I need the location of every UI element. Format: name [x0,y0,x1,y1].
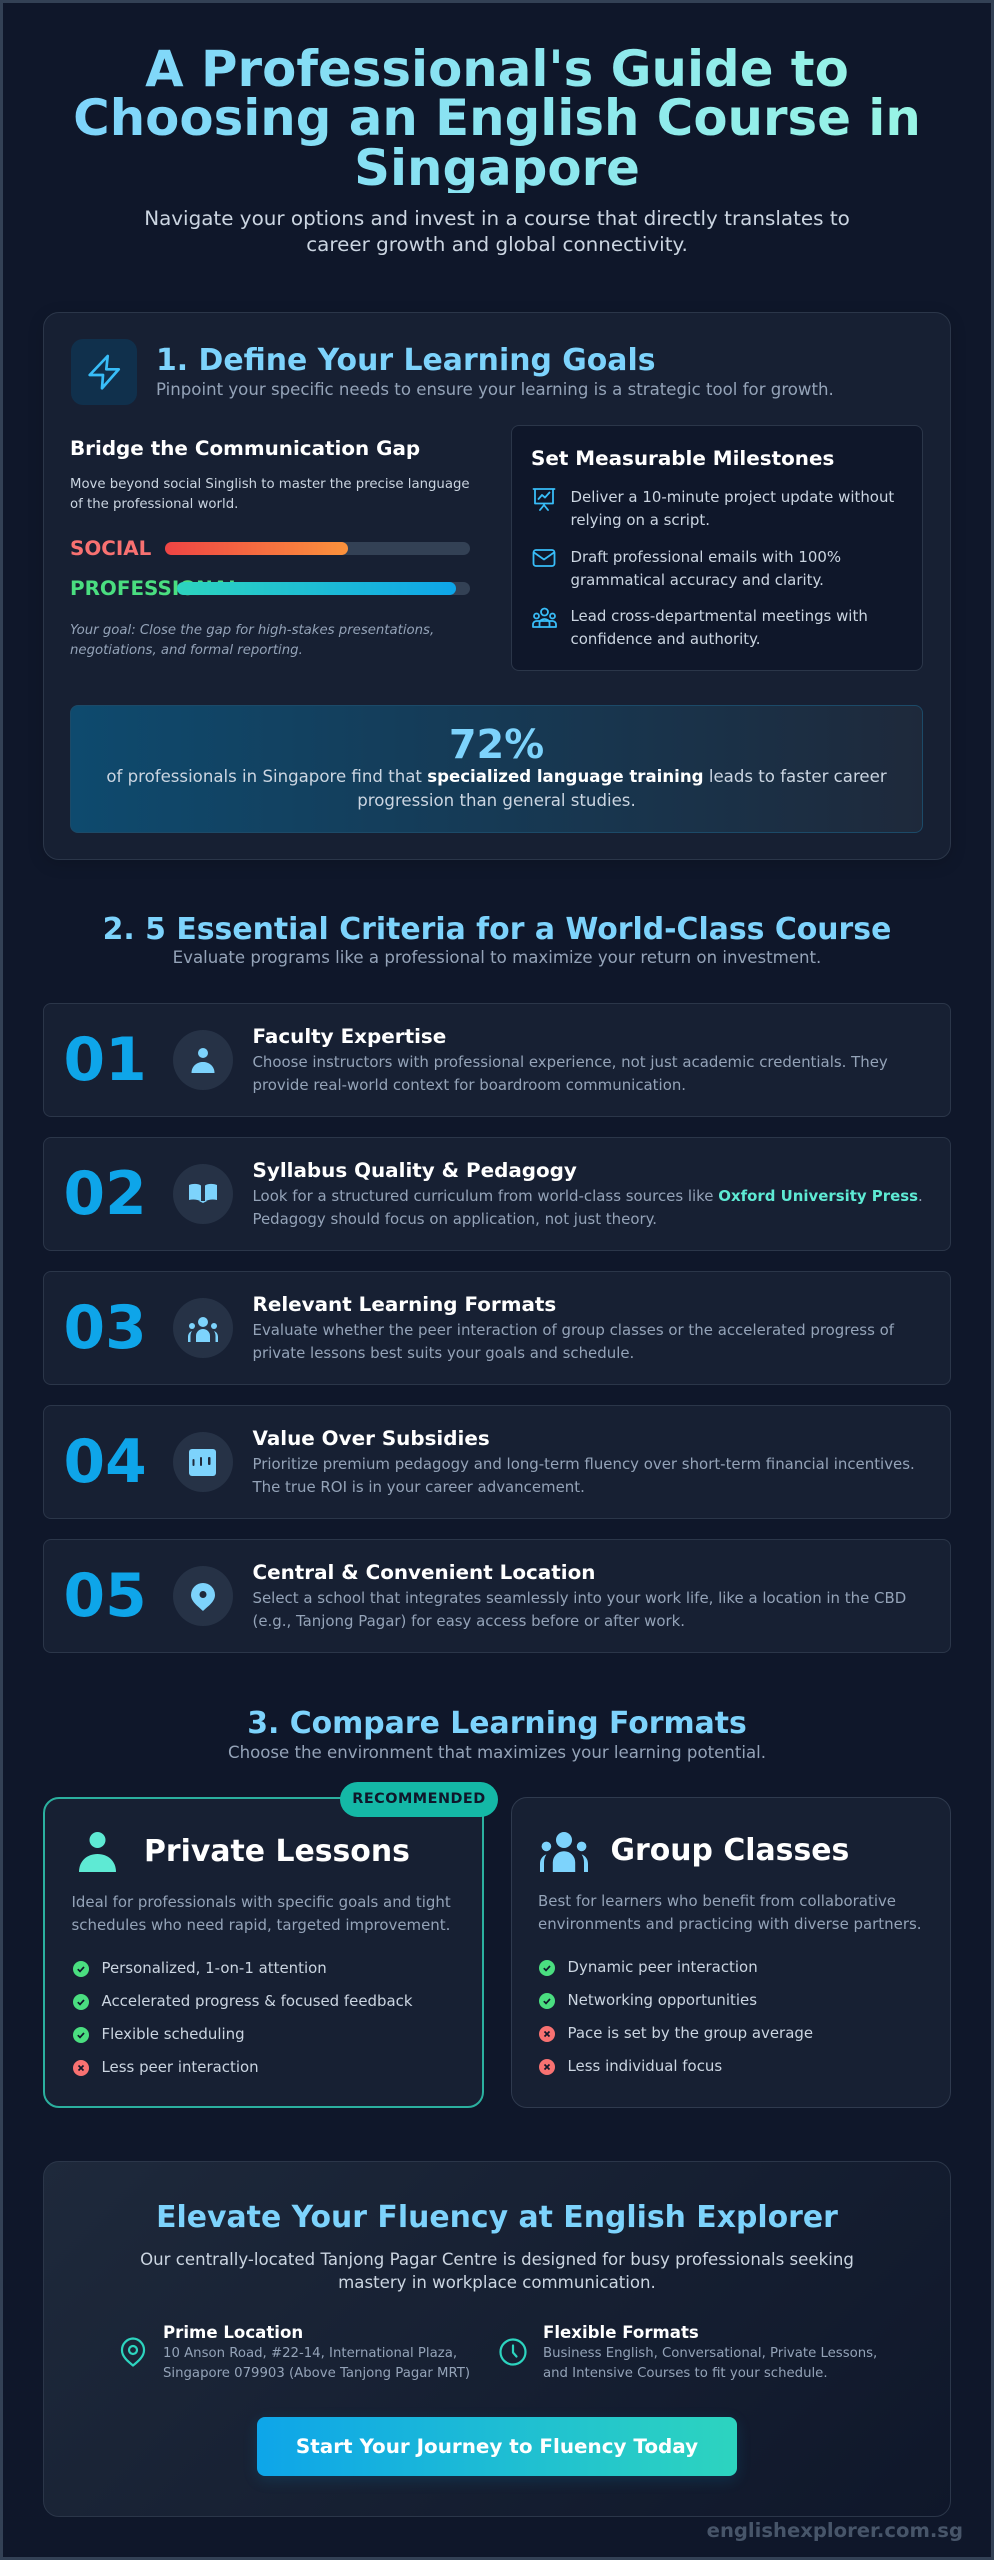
title: Singapore [354,138,640,196]
text: flexible formats: Flexible Formats [543,2323,699,2342]
text: milestone 3: confidence and authority. [570,630,761,648]
panel: criterion 02: 02 [64,1160,147,1229]
text: flexible formats: and Intensive Courses to fit your schedule. [543,2366,828,2381]
footer url: englishexplorer.com.sg [707,2519,963,2542]
panel: group classes [511,1797,951,2108]
panel: criterion 03: private lessons best suits your goals and schedule. [252,1344,634,1362]
heading: milestones: Set Measurable Milestones [531,447,834,470]
panel: criterion 01: Faculty Expertise [252,1025,446,1048]
title [43,44,951,193]
panel: criterion 05: 05 [64,1562,147,1631]
text: private description: schedules who need rapid, targeted improvement. [72,1916,450,1934]
panel: call to action [43,2161,951,2517]
text: milestone 3 [570,607,868,648]
icon: lightning bolt [71,339,137,405]
panel: criterion 03: Evaluate whether the peer interaction of group classes or the accelerated progress of [252,1320,894,1338]
text: bridge description [70,477,470,512]
list: private pros and cons: Personalized, 1-on-1 attention [102,1959,327,1977]
title: A Professional's Guide to [145,40,849,98]
heading: group classes: Group Classes [610,1833,849,1868]
list: group pros and cons: Pace is set by the group average [568,2024,813,2042]
badge: recommended: RECOMMENDED [352,1791,486,1807]
text: milestone 1: Deliver a 10-minute project update without [570,488,894,506]
text: goal note: Your goal: Close the gap for high-stakes presentations, [70,623,434,638]
panel: criterion 02 [43,1137,951,1251]
subtitle: Navigate your options and invest in a course that directly translates to [144,206,850,230]
text: prime location: Singapore 079903 (Above Tanjong Pagar MRT) [163,2366,470,2381]
panel: criterion 02: Pedagogy should focus on application, not just theory. [252,1210,657,1228]
text: bridge description: of the professional world. [70,497,238,512]
text: stat description: of professionals in Singapore find that specialized language training leads to faster career [106,767,887,786]
list: private pros and cons [73,1959,413,2076]
list: private pros and cons: Flexible scheduling [102,2025,245,2043]
panel: criterion 04: Prioritize premium pedagogy and long-term fluency over short-term financial incentives. [252,1454,915,1472]
list: group pros and cons: Less individual focus [568,2057,722,2075]
heading: call to action: Elevate Your Fluency at English Explorer [156,2200,838,2235]
panel: criterion 04: The true ROI is in your career advancement. [252,1478,585,1496]
list: group pros and cons: Networking opportunities [568,1991,757,2009]
text: group description: environments and practicing with diverse partners. [538,1915,922,1933]
panel: milestones [511,425,923,671]
section 2 heading: 2. 5 Essential Criteria for a World-Class Course [103,912,891,947]
subtitle [144,206,850,256]
list: group pros and cons: Dynamic peer interaction [568,1958,758,1976]
button: start your journey: Start Your Journey to Fluency Today [296,2435,698,2458]
panel: define learning goals [43,312,951,860]
text: call to action description [140,2250,854,2292]
panel: statistic callout [70,705,923,833]
list: private pros and cons: Accelerated progress & focused feedback [102,1992,413,2010]
text: group description [538,1892,922,1933]
heading: bridge the gap: Bridge the Communication Gap [70,436,420,460]
text: milestone 2 [570,548,841,589]
panel: criterion 04 [43,1405,951,1519]
text: prime location [163,2323,470,2381]
text: prime location: Prime Location [163,2323,303,2342]
panel: criterion 05: (e.g., Tanjong Pagar) for easy access before or after work. [252,1612,685,1630]
text: stat description: progression than general studies. [357,791,636,810]
text: flexible formats: Business English, Conversational, Private Lessons, [543,2346,877,2361]
text: private description: Ideal for professionals with specific goals and tight [72,1893,451,1911]
text: flexible formats [543,2323,877,2381]
icon: team [532,608,557,628]
heading: private lessons: Private Lessons [144,1834,410,1869]
badge: recommended [340,1782,498,1817]
stat: 72%: 72% [449,722,544,768]
text: milestone 1: relying on a script. [570,511,710,529]
panel: criterion 05 [43,1539,951,1653]
section 3 heading: 3. Compare Learning Formats [247,1706,747,1741]
icon: person [79,1832,116,1872]
text: group description: Best for learners who benefit from collaborative [538,1892,896,1910]
label: professional: PROFESSIONAL [70,577,241,600]
section 2 subheading: Evaluate programs like a professional to maximize your return on investment. [173,948,821,967]
subtitle: career growth and global connectivity. [306,233,688,256]
text: goal note: negotiations, and formal reporting. [70,643,303,658]
text: call to action description: mastery in workplace communication. [338,2273,656,2292]
button: start your journey [257,2417,737,2476]
section 1 subheading: Pinpoint your specific needs to ensure your learning is a strategic tool for growth. [156,380,834,399]
section 1 heading: 1. Define Your Learning Goals [156,343,655,378]
panel: criterion 03: Relevant Learning Formats [252,1293,556,1316]
section 3 subheading: Choose the environment that maximizes your learning potential. [228,1743,766,1762]
text: stat description [106,767,887,810]
icon: group [540,1832,588,1872]
text: private description [72,1893,451,1934]
text: milestone 2: Draft professional emails with 100% [570,548,841,566]
icon: presentation chart [532,488,556,511]
list: group pros and cons [539,1958,813,2075]
icon: clock [499,2338,527,2366]
panel: criterion 01 [43,1003,951,1117]
panel: criterion 02: Syllabus Quality & Pedagogy [252,1159,577,1182]
text: call to action description: Our centrally-located Tanjong Pagar Centre is designed for busy professionals seeking [140,2250,854,2269]
panel: criterion 04: Value Over Subsidies [252,1427,490,1450]
text: milestone 1 [570,488,894,529]
panel: criterion 01: 01 [64,1026,147,1095]
text: milestone 3: Lead cross-departmental meetings with [570,607,868,625]
text: milestone 2: grammatical accuracy and clarity. [570,571,824,589]
panel: private lessons [43,1797,484,2108]
text: bridge description: Move beyond social Singlish to master the precise language [70,477,470,492]
panel: criterion 02: Look for a structured curriculum from world-class sources like Oxford University Press. [252,1186,923,1204]
panel: criterion 04: 04 [64,1428,147,1497]
list: private pros and cons: Less peer interaction [102,2058,259,2076]
icon: envelope [532,549,556,567]
panel: criterion 05: Select a school that integrates seamlessly into your work life, like a location in the CBD [252,1588,906,1606]
bar: social [165,542,470,555]
panel: criterion 01: provide real-world context for boardroom communication. [252,1076,686,1094]
bar: professional [177,582,470,595]
text: prime location: 10 Anson Road, #22-14, International Plaza, [163,2346,457,2361]
panel: criterion 03: 03 [64,1294,147,1363]
icon: location pin [120,2337,146,2367]
panel: criterion 03 [43,1271,951,1385]
text: goal note [70,623,434,658]
label: social: SOCIAL [70,537,151,560]
title: Choosing an English Course in [73,89,921,147]
panel: criterion 01: Choose instructors with professional experience, not just academic credentials. They [252,1052,888,1070]
panel: criterion 05: Central & Convenient Location [252,1561,595,1584]
